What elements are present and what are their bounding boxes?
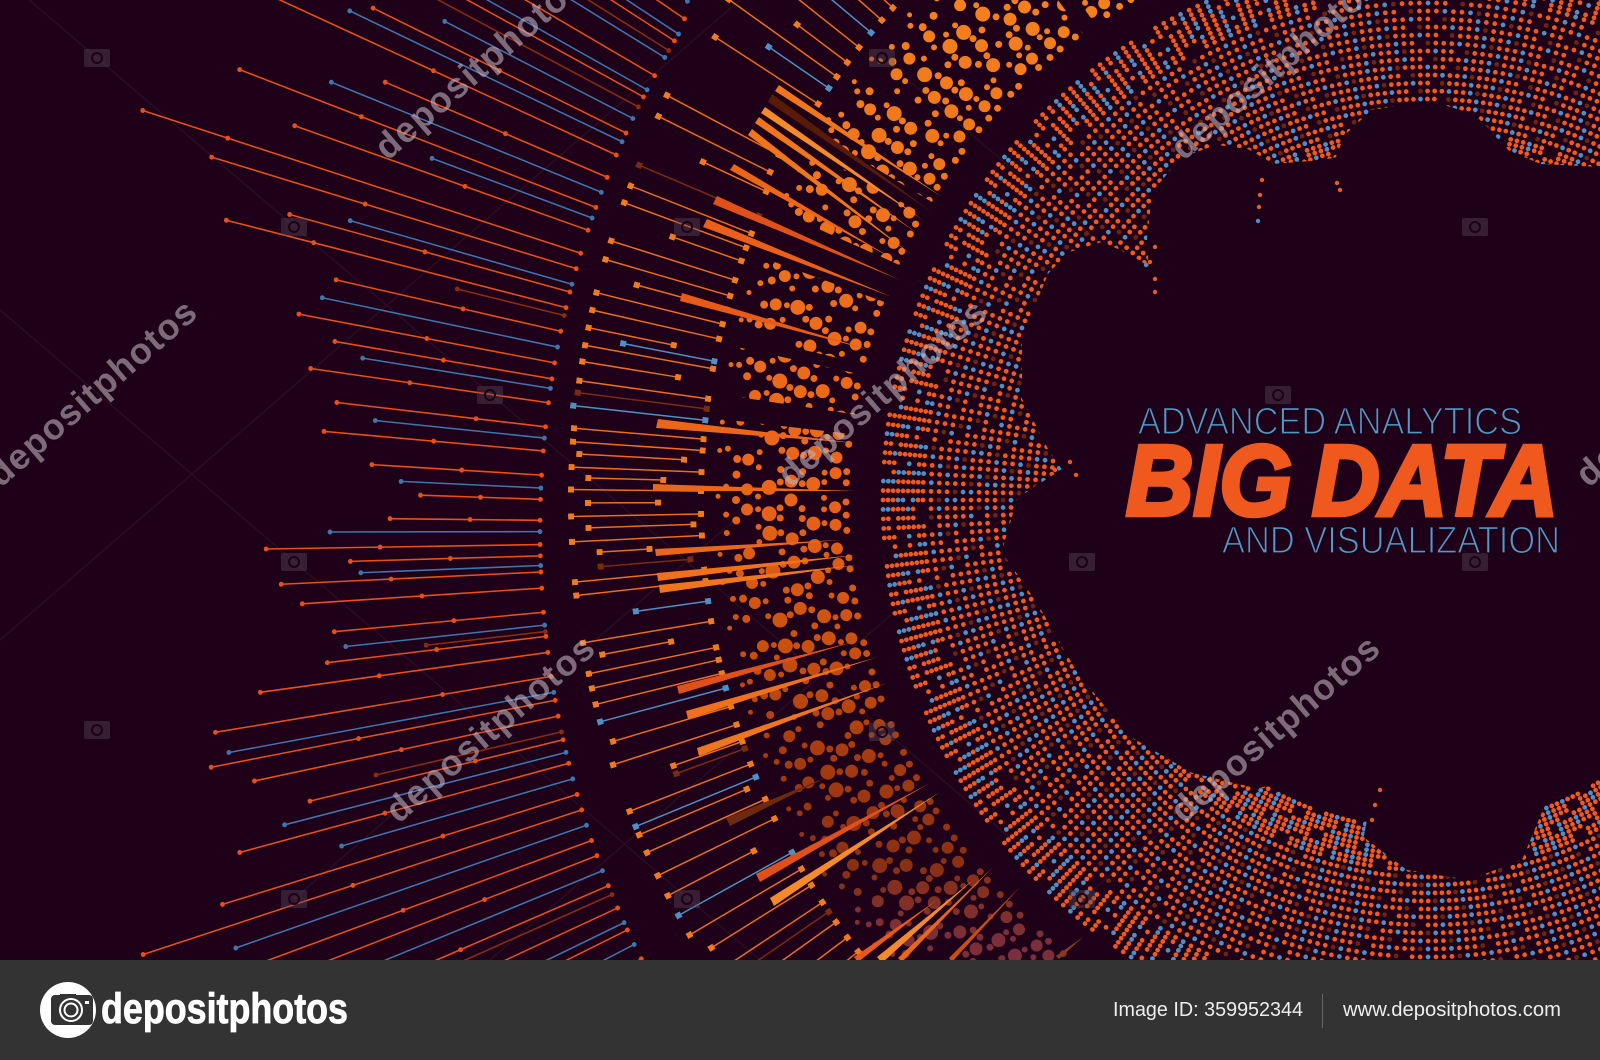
image id: Image ID: 359952344	[1113, 999, 1303, 1021]
outer long radial lines	[118, 0, 700, 1060]
dotted ring: dark red dots	[931, 3, 1600, 997]
outer lines: orange	[118, 0, 700, 1060]
dumbbell lines band: orange	[571, 0, 905, 1012]
watermark text: depositphotos	[769, 291, 994, 494]
footer bar	[0, 960, 1600, 1060]
watermark camera icons	[84, 49, 1488, 908]
dotted ring: orange dots	[883, 0, 1600, 1045]
dotted ring: blue dots	[883, 0, 1600, 1045]
central hole of the ring	[1005, 107, 1600, 877]
dumbbell lines band: blue	[573, 0, 871, 915]
title: advanced analytics: ADVANCED ANALYTICS	[1138, 401, 1522, 443]
footer separator	[1322, 994, 1323, 1028]
title: big data	[1126, 425, 1558, 537]
title: big data: DATA	[1312, 425, 1558, 537]
watermark text: depositphotos	[377, 627, 602, 830]
watermark text	[0, 0, 1600, 830]
dumbbell lines band: dark red	[578, 165, 829, 985]
tapered radial wedges	[653, 85, 1083, 963]
ring drip dots	[1053, 178, 1382, 822]
bubble band	[716, 0, 1134, 960]
outer lines: dark red	[368, 0, 672, 1060]
website url: www.depositphotos.com	[1342, 999, 1561, 1021]
watermark text: depositphotos	[1162, 627, 1387, 830]
title: big data: BIG	[1126, 425, 1292, 537]
footer logo wordmark: depositphotos	[101, 985, 348, 1033]
subtitle: and visualization: AND VISUALIZATION	[1222, 520, 1560, 562]
dotted ring	[883, 0, 1600, 1045]
icon: footer logo camera	[40, 982, 96, 1038]
outer lines: blue	[222, 0, 690, 1060]
